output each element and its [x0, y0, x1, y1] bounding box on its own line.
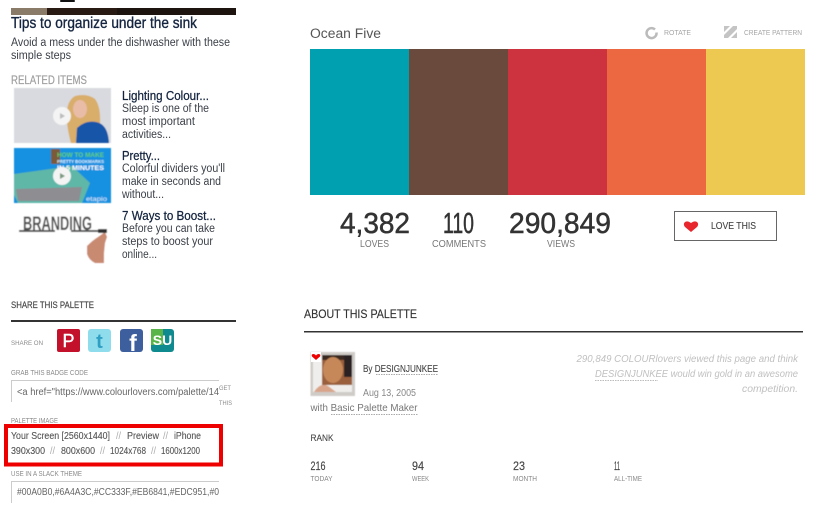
article summary: simple steps [11, 50, 71, 62]
panel: related items list [14, 88, 225, 263]
author block: By DESIGNJUNKEE [363, 364, 438, 375]
callout: red highlight box [6, 426, 221, 464]
views note: competition. [742, 383, 798, 395]
love this button: LOVE THIS [711, 221, 756, 232]
panel: article teaser [11, 15, 230, 62]
size links: // [151, 446, 156, 457]
related item 2 text [121, 149, 225, 201]
avatar [310, 352, 355, 396]
palette image links: PALETTE IMAGE [11, 418, 58, 425]
rank: today: 216 [310, 459, 326, 473]
badge code field [11, 370, 233, 407]
icon: heart [684, 221, 698, 232]
heading: rank: RANK [310, 433, 334, 443]
slack theme field: #00A0B0,#6A4A3C,#CC333F,#EB6841,#EDC951,#0 [17, 487, 219, 498]
size links: // [116, 431, 121, 442]
article summary: Avoid a mess under the dishwasher with these [11, 37, 230, 49]
related item 3 text: steps to boost your [122, 236, 213, 248]
badge code field: <a href="https://www.colourlovers.com/palette/14 [17, 387, 219, 398]
thumbnail: branding hand: BRANDING [23, 214, 92, 235]
size links: // [100, 446, 105, 457]
author block: with Basic Palette Maker [310, 402, 418, 414]
icon: twitter: t [96, 331, 103, 353]
slack theme field: USE IN A SLACK THEME [11, 471, 82, 478]
size links: 800x600 [61, 446, 95, 457]
heading: related items: RELATED ITEMS [11, 75, 87, 87]
stat: comments [432, 208, 486, 250]
icon: pinterest [57, 329, 80, 352]
rank: month: 23 [513, 459, 525, 473]
views note: DESIGNJUNKEE would win gold in an awesome [595, 368, 798, 380]
rotate action [647, 28, 691, 38]
icon: pinterest: P [62, 331, 75, 351]
thumbnail: branding hand [14, 208, 111, 263]
stat: loves: 4,382 [340, 208, 410, 240]
stat: views: 290,849 [509, 208, 611, 240]
related item 2 text: make in seconds and [122, 176, 221, 188]
thumbnail: bookmarks video: etapio [86, 197, 108, 203]
related item 1 text: Lighting Colour... [122, 89, 209, 103]
thumbnail: bookmarks video: PRETTY BOOKMARKS [57, 159, 104, 164]
views note [576, 353, 799, 395]
author block [310, 352, 438, 414]
size links: // [163, 431, 168, 442]
slack theme field [11, 471, 219, 503]
icon: pattern [724, 26, 737, 38]
author block: Aug 13, 2005 [363, 388, 416, 399]
stat: views: VIEWS [547, 239, 575, 250]
views note: 290,849 COLOURlovers viewed this page and think [576, 353, 799, 365]
icon: stumbleupon: SU [153, 332, 172, 348]
create pattern action: CREATE PATTERN [744, 28, 802, 37]
related item 3 text: 7 Ways to Boost... [122, 209, 216, 223]
rank: week: WEEK [412, 476, 429, 483]
heading: about this palette: ABOUT THIS PALETTE [304, 307, 417, 321]
badge code field: GRAB THIS BADGE CODE [11, 370, 88, 377]
love this button [674, 212, 776, 240]
rank: all-time: ALL-TIME [614, 476, 642, 483]
related item 2 text: Pretty... [122, 149, 160, 163]
share row: SHARE ON [11, 340, 43, 347]
heading: share this palette: SHARE THIS PALETTE [11, 300, 94, 310]
related item 2 text: Colorful dividers you'll [122, 163, 225, 175]
related item 1 text: most important [122, 116, 196, 128]
related item 1 text: Sleep is one of the [122, 103, 209, 115]
related item 3 text: Before you can take [122, 223, 215, 235]
cropped article image strip [11, 0, 236, 15]
related item 1 text: activities... [122, 129, 171, 141]
size links: 390x300 [11, 446, 45, 457]
rank: all-time [614, 459, 642, 483]
size links: // [50, 446, 55, 457]
create pattern action [724, 26, 802, 38]
article heading: Tips to organize under the sink [11, 15, 197, 32]
article summary [11, 37, 230, 62]
thumbnail: bookmarks video: IN 5 MINUTES [57, 165, 105, 172]
icon: facebook [120, 329, 143, 356]
size links: Your Screen [2560x1440] [11, 431, 110, 442]
palette swatches [310, 49, 805, 195]
size links: iPhone [174, 431, 201, 442]
thumbnail: woman shouting [14, 88, 111, 143]
related item 2 text: without... [121, 189, 164, 201]
rank: month: MONTH [513, 476, 537, 483]
size links: Preview [127, 431, 160, 442]
rank: all-time: 11 [614, 459, 620, 473]
icon: rotate [647, 28, 657, 38]
palette title: Ocean Five [310, 26, 381, 41]
related item 1 text [122, 89, 209, 141]
icon: facebook: f [129, 330, 137, 356]
badge code field: THIS [219, 400, 233, 407]
rank: month [513, 459, 537, 483]
rank: today: TODAY [310, 476, 333, 483]
palette image links [6, 418, 221, 464]
icon: stumbleupon [151, 329, 174, 352]
badge code field: GET [219, 385, 231, 392]
stat: loves: LOVES [360, 239, 389, 250]
share row [11, 329, 174, 356]
rank: week [412, 459, 429, 483]
stat: comments: COMMENTS [432, 239, 486, 250]
rank: today [310, 459, 333, 483]
related item 3 text [122, 209, 216, 261]
size links: 1600x1200 [161, 446, 200, 457]
rank: week: 94 [412, 459, 424, 473]
icon: twitter [88, 329, 111, 353]
size links [11, 431, 201, 457]
stat: comments: 110 [443, 208, 474, 240]
related item 3 text: online... [122, 249, 157, 261]
thumbnail: bookmarks video [14, 148, 111, 203]
size links: 1024x768 [110, 446, 146, 457]
rotate action: ROTATE [664, 28, 691, 37]
thumbnail: bookmarks video: HOW TO MAKE [57, 153, 104, 159]
